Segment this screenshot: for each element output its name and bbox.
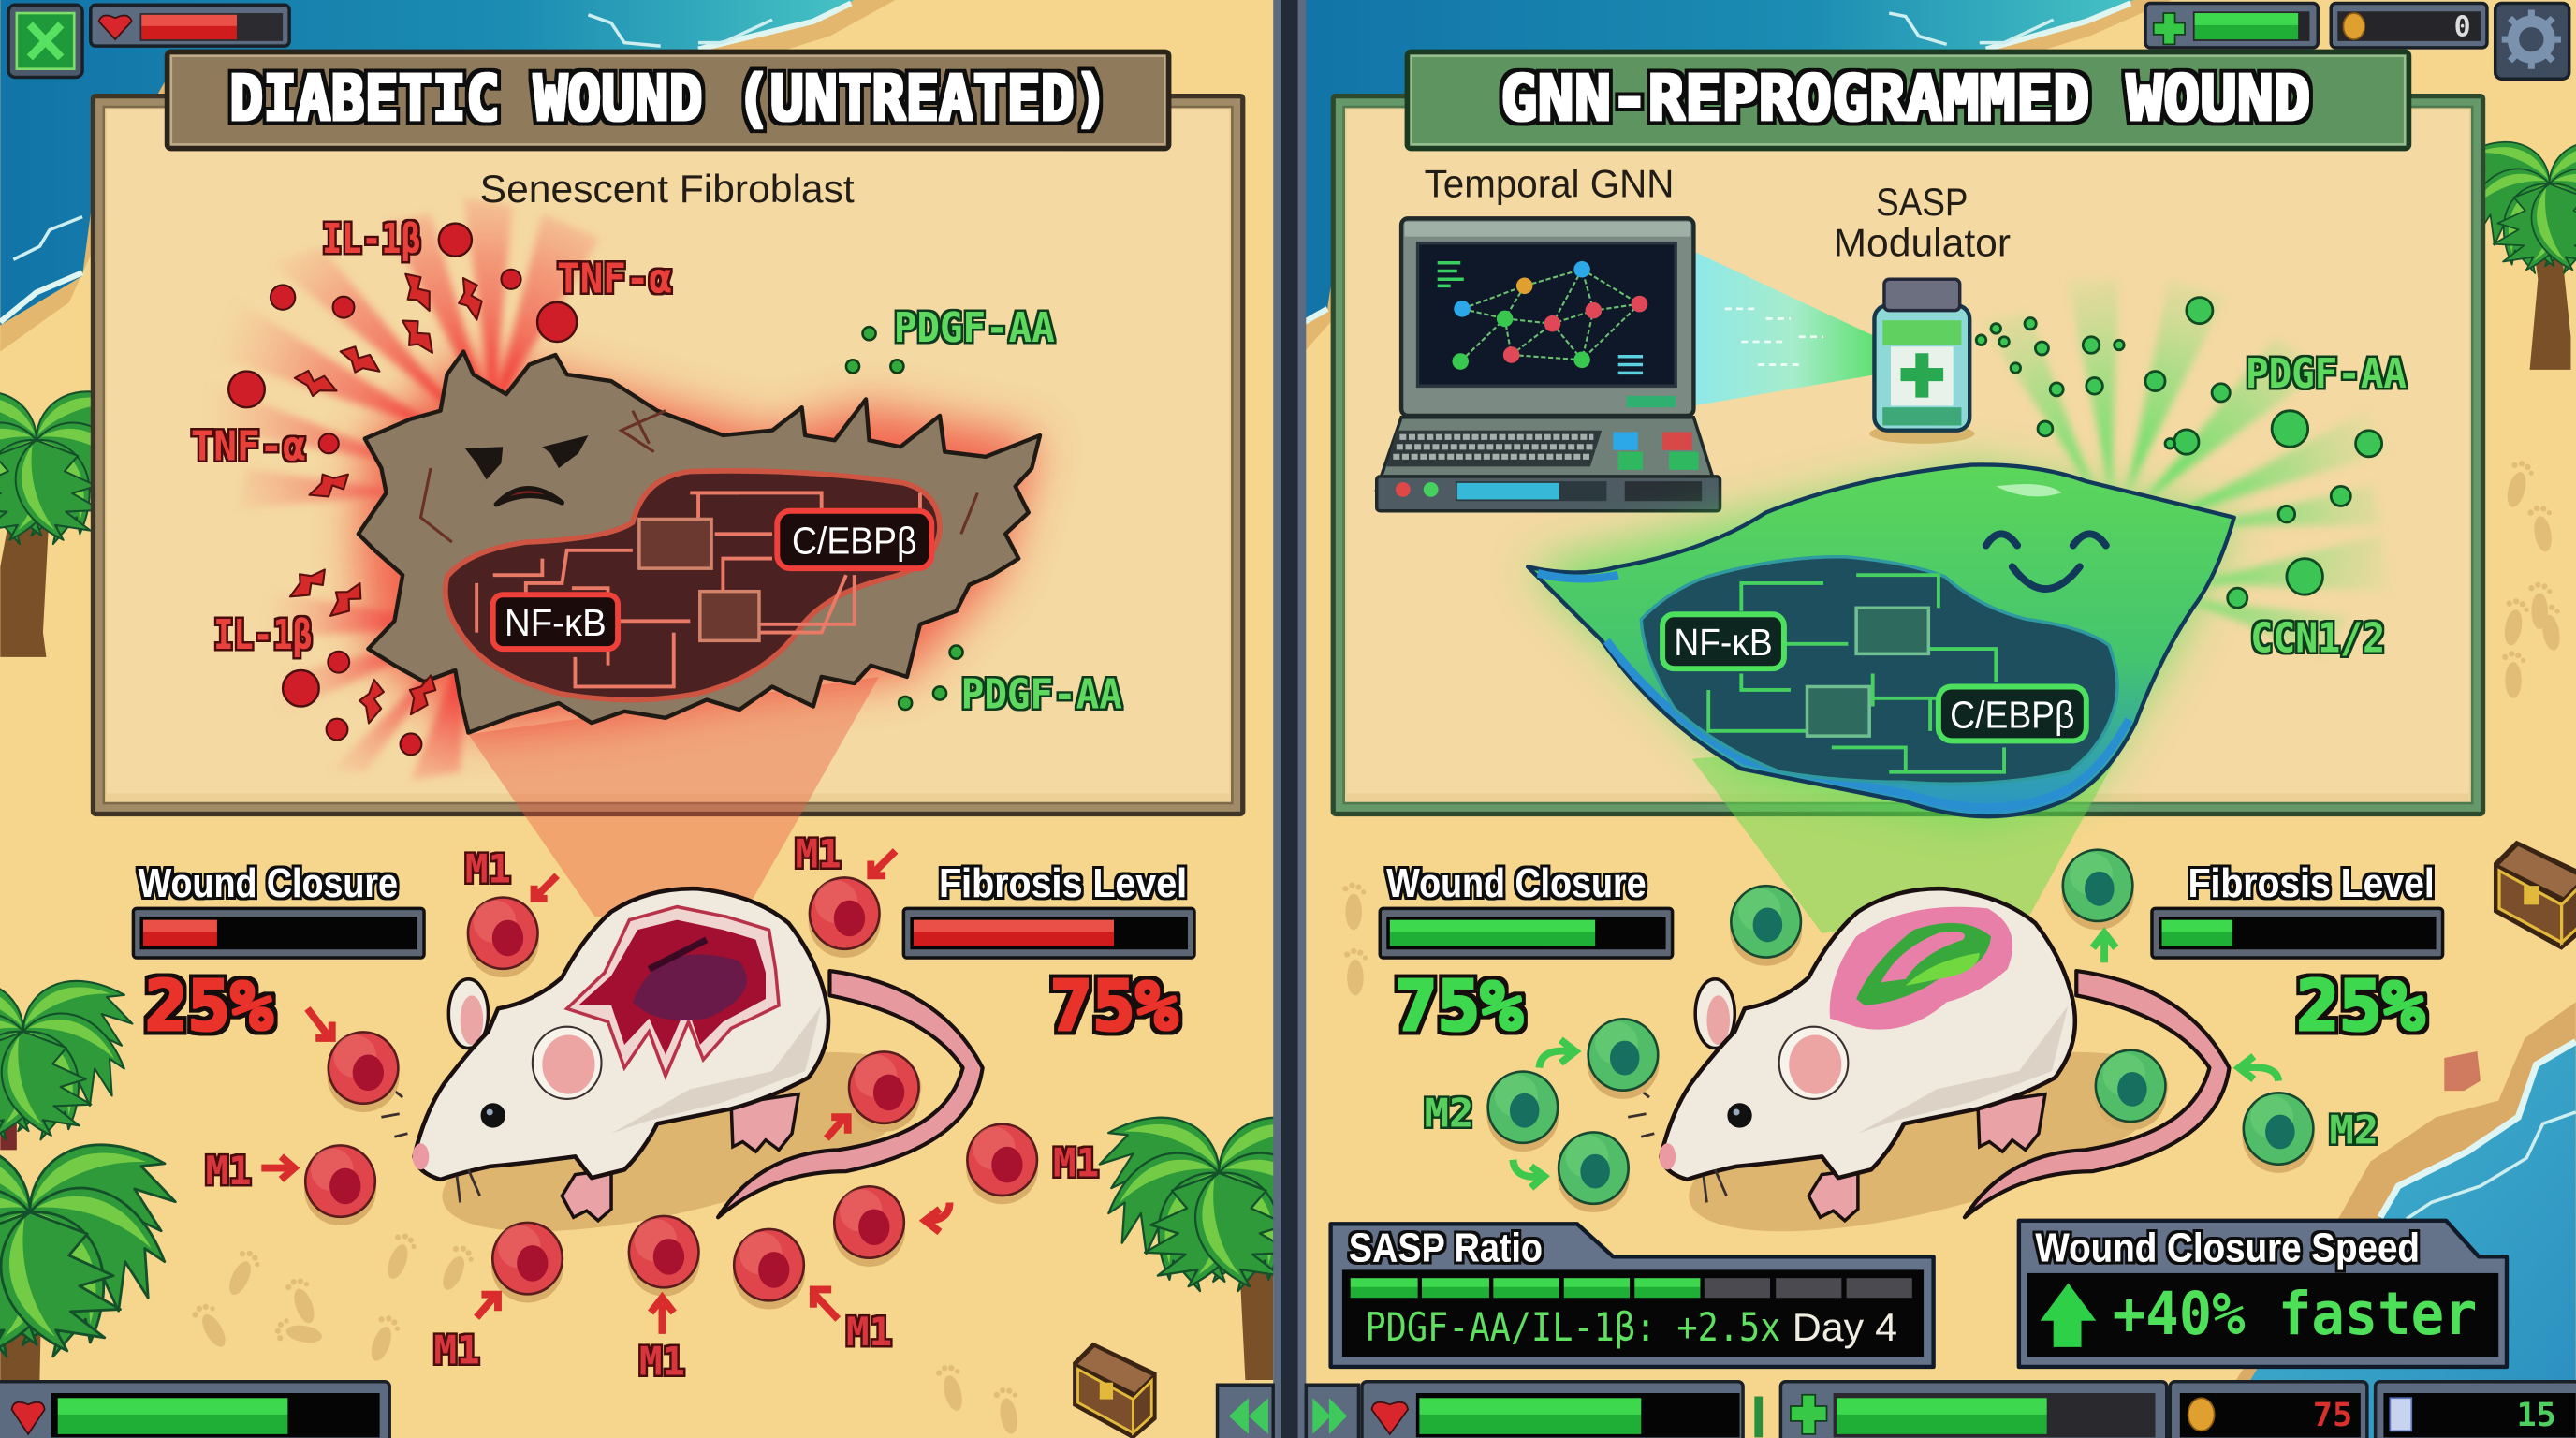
beam from fibroblast to mouse wound [468, 677, 879, 917]
C/EBPb node: C/EBPβ [1950, 693, 2075, 736]
SASP modulator vial [1869, 279, 1974, 444]
M1 labels: M1 [434, 1327, 480, 1372]
bottom HUD: heart bar [1362, 1382, 1743, 1438]
beam from GNN computer to vial [1693, 251, 1876, 405]
nucleus chips [1807, 608, 1928, 736]
ocean: top right [1305, 0, 2172, 352]
treasure chest: right [2494, 841, 2576, 950]
M1 labels: M1 [796, 830, 842, 876]
healthy fibroblast glow and rays [1528, 279, 2390, 821]
label: IL-1b lower: IL-1β [213, 611, 313, 659]
NF-kB node [493, 594, 618, 649]
wound closure gauge: treated: Wound Closure [1386, 860, 1647, 906]
wound closure gauge: untreated [133, 860, 424, 958]
treasure chest: left [1073, 1343, 1157, 1438]
cell body [359, 352, 1040, 733]
label: PDGF-AA right: PDGF-AA [2246, 350, 2407, 398]
reprogrammed fibroblast [1528, 464, 2234, 816]
up arrow [2041, 1283, 2096, 1347]
label: CCN1/2: CCN1/2 [2250, 615, 2385, 663]
M1 labels: M1 [1053, 1139, 1099, 1185]
monitor [1401, 218, 1693, 416]
nucleus [446, 471, 940, 700]
rewind button [1218, 1385, 1273, 1438]
palm tree: lower left front [0, 1108, 197, 1380]
bottom HUD: plus bar [1780, 1382, 2167, 1438]
M2 labels: M2 [2329, 1107, 2378, 1152]
M1 labels: M1 [465, 845, 511, 891]
wound closure speed panel: Wound Closure Speed [2035, 1225, 2420, 1271]
M1 labels: M1 [206, 1148, 252, 1194]
fibrosis gauge: treated [2152, 860, 2443, 958]
label: PDGF-AA top: PDGF-AA [894, 304, 1055, 352]
label: TNF-a top: TNF-α [557, 255, 672, 302]
M1 labels [206, 830, 1099, 1385]
fast forward button [1306, 1385, 1358, 1438]
ocean: bottom right [2234, 1002, 2576, 1438]
top right HUD: coin counter [2331, 4, 2487, 48]
25 percent value: 25% [2296, 967, 2424, 1047]
SASP ratio panel: SASP Ratio [1349, 1225, 1543, 1271]
wound closure gauge: untreated: Wound Closure [139, 860, 398, 906]
nucleus circuit lines [1708, 575, 2004, 772]
bottom HUD: coin counter [2170, 1382, 2367, 1438]
bottom HUD: hourglass counter: 15 [2516, 1396, 2556, 1434]
mouse with open wound [381, 888, 983, 1269]
label: TNF-a left: TNF-α [191, 422, 306, 470]
title plate: GNN wound: GNN-REPROGRAMMED WOUND [1500, 62, 2310, 135]
M1 macrophages [304, 876, 1038, 1310]
C/EBPb node [777, 511, 931, 568]
fibroblast toxic glow and rays [198, 198, 1038, 780]
M2 arrows [1513, 933, 2278, 1188]
palm tree: right edge [2446, 119, 2576, 370]
75 percent value: 75% [1050, 967, 1178, 1047]
top left HUD: health bar [91, 5, 289, 46]
NF-kB node: NF-κB [505, 601, 607, 644]
small green gap marker [1754, 1397, 1763, 1437]
settings gear button [2496, 4, 2569, 79]
slime cell body [1528, 464, 2234, 816]
ratio segments [1351, 1278, 1912, 1298]
NF-kB node [1662, 614, 1784, 668]
palm tree: lower right of left panel [1099, 1116, 1273, 1380]
75 percent value: 75% [1395, 967, 1523, 1047]
left panel frame [91, 94, 1245, 816]
M2 labels [1425, 1091, 2378, 1152]
senescent fibroblast cell [359, 352, 1040, 733]
small seashell [2444, 1051, 2481, 1091]
happy face [1986, 534, 2106, 589]
label: PDGF-AA lower: PDGF-AA [961, 670, 1122, 718]
green growth factor particles [1976, 298, 2382, 608]
sad face [465, 435, 588, 505]
blue rim [1538, 573, 2129, 808]
red cytokine particles [228, 224, 577, 755]
ocean: top left [0, 0, 896, 352]
title plate: diabetic wound [165, 50, 1171, 151]
25 percent value: 25% [145, 967, 273, 1047]
title plate: diabetic wound: DIABETIC WOUND (UNTREATED) [229, 62, 1108, 135]
bottom HUD: hourglass counter [2376, 1382, 2576, 1438]
C/EBPb node: C/EBPβ [792, 519, 916, 562]
label: SASP Modulator [1834, 180, 2011, 265]
label: Temporal GNN: Temporal GNN [1425, 162, 1674, 206]
nucleus chips [639, 519, 759, 640]
open wound [567, 907, 779, 1076]
beam from cell to healed mouse [1692, 723, 2135, 933]
left panel heading: Senescent Fibroblast [480, 167, 855, 211]
palm tree: lower left back [0, 953, 148, 1155]
bottom left HUD: health bar [0, 1382, 389, 1438]
right panel frame [1331, 94, 2485, 816]
wound closure gauge: treated [1380, 860, 1673, 958]
SASP ratio panel [1331, 1224, 1934, 1367]
M1 labels: M1 [639, 1339, 685, 1385]
footprints [189, 459, 2567, 1436]
SASP ratio panel: PDGF-AA/IL-1β: +2.5x [1365, 1304, 1780, 1350]
cell cracks [421, 411, 977, 542]
M2 labels: M2 [1425, 1091, 1473, 1137]
title plate: GNN wound [1405, 50, 2411, 151]
label: SASP Modulator: Modulator [1834, 221, 2011, 265]
fibrosis gauge: untreated: Fibrosis Level [939, 860, 1187, 906]
screen with network graph [1418, 243, 1676, 386]
palm tree: upper left [0, 364, 156, 657]
SASP ratio panel: Day 4 [1793, 1305, 1897, 1349]
top right HUD: plus bar [2145, 4, 2318, 48]
fibrosis gauge: treated: Fibrosis Level [2188, 860, 2435, 906]
label: SASP Modulator: SASP [1876, 180, 1968, 224]
top left HUD: close button [8, 5, 82, 77]
cell highlight [1996, 484, 2061, 496]
M2 macrophages [1486, 848, 2315, 1212]
M1 arrows [261, 851, 950, 1334]
wound closure speed panel [2019, 1221, 2507, 1367]
top right HUD: coin counter: 0 [2454, 11, 2471, 44]
fibrosis gauge: untreated [903, 860, 1194, 958]
NF-kB node: NF-κB [1674, 621, 1773, 664]
wound closure speed panel: +40% faster [2113, 1279, 2477, 1348]
divider between panels [1273, 0, 1306, 1438]
nucleus [1641, 557, 2117, 784]
green particles in left panel [846, 327, 963, 710]
bottom HUD: coin counter: 75 [2313, 1396, 2352, 1434]
healed mouse [1628, 888, 2229, 1269]
temporal GNN computer [1377, 218, 1720, 511]
M1 labels: M1 [846, 1309, 892, 1355]
nucleus circuit lines [476, 492, 920, 686]
keyboard base [1377, 418, 1720, 511]
healing wound [1830, 907, 2012, 1030]
label: IL-1b top: IL-1β [322, 215, 421, 263]
